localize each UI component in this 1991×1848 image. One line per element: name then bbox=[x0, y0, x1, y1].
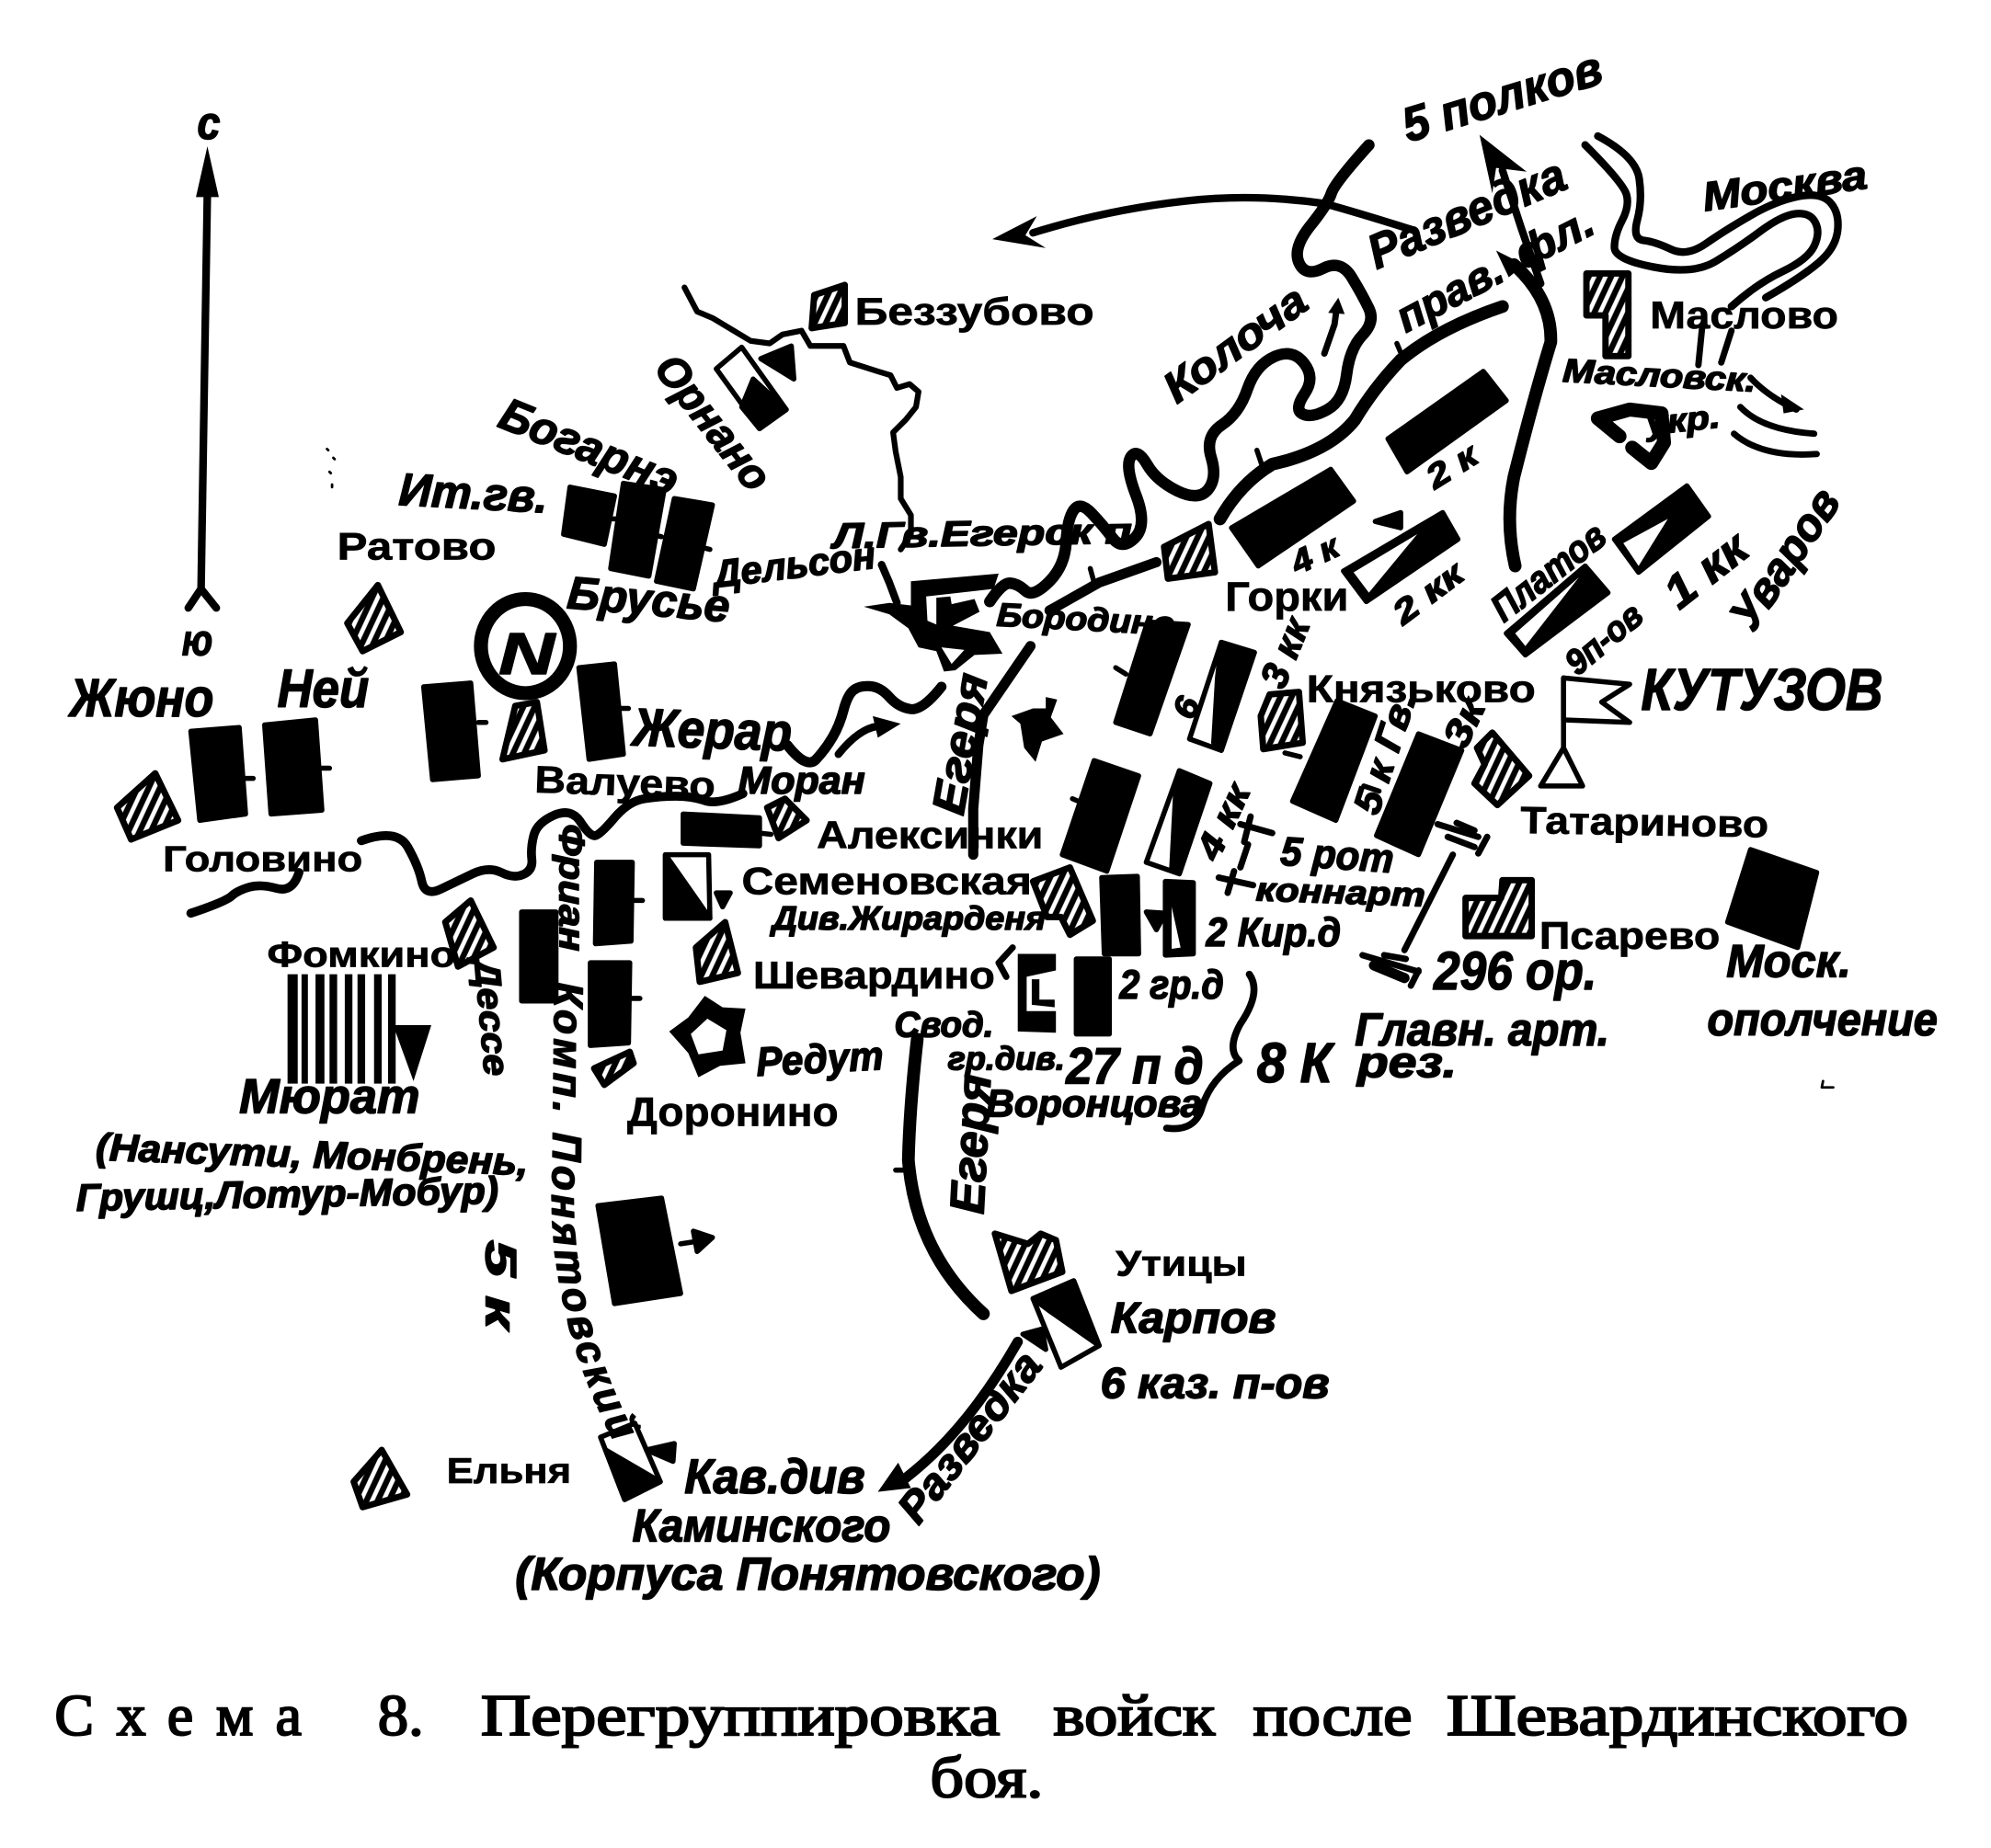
caption bbox=[55, 1683, 1908, 1810]
Murat cavalry bars bbox=[288, 975, 431, 1084]
unit: 3rd corps bbox=[1377, 734, 1461, 855]
label: Ornano: Орнано bbox=[646, 345, 782, 500]
label: Beauharnais: Богарнэ bbox=[492, 388, 686, 506]
label: Valuevo: Валуево bbox=[534, 758, 716, 807]
label: Kutuzov: КУТУЗОВ bbox=[1642, 657, 1882, 723]
label: militia: ополчение bbox=[1707, 994, 1938, 1045]
label: Semenovskaya: Семеновская bbox=[742, 859, 1032, 902]
unit: Guard bbox=[424, 683, 478, 780]
unit: Dessaix bbox=[521, 912, 556, 1001]
river: Kolocha upper bbox=[990, 145, 1371, 601]
label: Nansouty group: (Нансути, Монбрень, bbox=[95, 1125, 529, 1183]
village: Borodino bbox=[1164, 524, 1215, 578]
half unit: 4th cavalry bbox=[1146, 770, 1210, 873]
label: reserve: рез. bbox=[1356, 1038, 1457, 1087]
caption word: after: после bbox=[1253, 1683, 1413, 1748]
label: Poniatowski corps: (Корпуса Понятовского) bbox=[515, 1548, 1101, 1600]
river: Moskva inner bank bbox=[1585, 145, 1818, 306]
unit: Compans bbox=[590, 963, 630, 1045]
label: Redoubt: Редут bbox=[755, 1033, 885, 1085]
compass arrow: ю bbox=[182, 615, 212, 664]
label: Bezzubovo: Беззубово bbox=[855, 290, 1094, 333]
label: 2nd cuirassiers: 2 Кир.д bbox=[1206, 910, 1341, 955]
half unit: 2nd cavalry bbox=[1344, 512, 1458, 601]
label: 27th division: 27 п д bbox=[1065, 1038, 1204, 1095]
label: main artillery: Главн. арт. bbox=[1355, 1004, 1609, 1055]
label: Gorki: Горки bbox=[1225, 575, 1348, 620]
village labels bbox=[163, 290, 1838, 1491]
label: right: прав. bbox=[1387, 245, 1511, 341]
label: Karpov regiments: 6 каз. п-ов bbox=[1101, 1358, 1330, 1407]
village: Aleksinki bbox=[767, 799, 807, 838]
label: Kolocha river: Колоча bbox=[1153, 275, 1316, 412]
unit: 5th corps bbox=[598, 1198, 681, 1304]
compass arrow: с bbox=[197, 97, 220, 149]
label: Italian guard: Ит.гв. bbox=[397, 463, 549, 523]
troop units bbox=[191, 346, 1816, 1500]
label: Karpov: Карпов bbox=[1111, 1294, 1276, 1342]
arrow: right flank reconnaissance bbox=[1503, 170, 1540, 283]
label: 3rd corps: 3к bbox=[1434, 690, 1494, 754]
label: Junot: Жюно bbox=[67, 668, 213, 728]
label: Golovino: Головино bbox=[163, 840, 362, 880]
print specks bbox=[327, 449, 1833, 1088]
unit: Junot bbox=[191, 727, 246, 820]
half unit: Platov bbox=[1506, 566, 1608, 655]
label: Borodino: Бородино bbox=[996, 596, 1175, 643]
compass arrow bbox=[182, 97, 220, 664]
half unit: 2nd cuirassiers bbox=[1146, 882, 1194, 955]
Redoubt bbox=[669, 996, 746, 1078]
unit: 2nd corps bbox=[1388, 371, 1506, 472]
unit: Moscow militia bbox=[1728, 850, 1816, 948]
label: Utitsy: Утицы bbox=[1116, 1244, 1247, 1283]
brace: 8th corps bbox=[1167, 975, 1254, 1129]
village: Psarevo bbox=[1466, 880, 1532, 936]
label: 5 companies: 5 рот bbox=[1279, 829, 1395, 882]
label: right flank reconnaissance: Разведка bbox=[1359, 148, 1574, 279]
label: southern reconnaissance: Разведка bbox=[887, 1341, 1051, 1532]
half unit: 1st cavalry bbox=[1614, 485, 1709, 573]
arrow: southern reconnaissance bbox=[906, 1341, 1018, 1477]
label: horse artillery: коннарт bbox=[1255, 870, 1425, 914]
river: Moskva outer bank bbox=[1598, 136, 1838, 298]
caption word: scheme: Схема bbox=[55, 1683, 302, 1748]
unit: Ney bbox=[265, 720, 322, 814]
label: Uvarov: Уваров bbox=[1719, 478, 1850, 639]
caption word: troops: войск bbox=[1053, 1683, 1215, 1748]
label: grenadier division: гр.див. bbox=[948, 1039, 1065, 1077]
label: 4th corps: 4 к bbox=[1284, 526, 1346, 582]
line: right flank bbox=[1510, 265, 1550, 566]
label: 2nd cavalry corps: 2 кк bbox=[1384, 553, 1472, 633]
unit: 4th corps bbox=[1231, 469, 1354, 566]
village: Knyazkovo bbox=[1261, 692, 1303, 749]
label: Platov: Платов bbox=[1482, 513, 1614, 630]
label: flank: фл. bbox=[1506, 197, 1602, 278]
label: jaegers north: Егеря bbox=[922, 669, 998, 818]
unit ticks bbox=[246, 519, 1379, 998]
half unit: Karpov bbox=[1023, 1281, 1099, 1367]
label: Moskva river: Москва bbox=[1699, 153, 1870, 221]
unit: 7th corps bbox=[1062, 760, 1139, 872]
troop labels bbox=[67, 40, 1938, 1600]
unit: Semenovskaya block bbox=[1102, 876, 1139, 954]
label: jaegers south: Егеря bbox=[940, 1073, 1001, 1215]
stream: Orzhanka bbox=[684, 288, 919, 550]
line: jaegers north bbox=[1220, 306, 1503, 519]
label: Grouchy group: Грушц,Лотур-Мобур) bbox=[75, 1169, 498, 1219]
caption second line: боя. bbox=[930, 1745, 1043, 1810]
unit: Italian guard bbox=[564, 487, 614, 544]
village: Valuevo bbox=[502, 702, 544, 759]
village: Semenovskaya bbox=[1033, 867, 1093, 935]
unit: Morand bbox=[683, 814, 760, 846]
label: Tatarinovo: Татариново bbox=[1520, 798, 1769, 846]
label: Friant: Фриан bbox=[552, 824, 591, 952]
label: 5 regiments: 5 полков bbox=[1396, 40, 1608, 153]
label: Shevardino: Шевардино bbox=[753, 953, 995, 997]
label: Elnya: Ельня bbox=[447, 1452, 571, 1491]
caption word: Shevardino: Шевардинского bbox=[1447, 1683, 1908, 1748]
label: 5th corps: 5 к bbox=[476, 1240, 525, 1332]
village: Maslovo bbox=[1586, 273, 1629, 356]
half unit: Kaminsky cavalry bbox=[601, 1423, 674, 1500]
Borodino fortification bbox=[864, 565, 1002, 671]
unit: 27th division bbox=[1076, 959, 1109, 1034]
line: Borodino jaegers bbox=[973, 562, 1156, 855]
label: 4th cavalry: 4 кк bbox=[1189, 775, 1259, 867]
village: Elnya bbox=[354, 1450, 407, 1507]
small arrow near Kolocha bbox=[1324, 305, 1337, 354]
label: Psarevo: Псарево bbox=[1539, 914, 1720, 957]
troop movement lines and arrows bbox=[839, 135, 1550, 1492]
label: Maslovo: Маслово bbox=[1650, 293, 1838, 337]
line: jaegers south bbox=[909, 1039, 983, 1314]
label: combined: Свод. bbox=[895, 1005, 993, 1044]
label: 8th corps: 8 К bbox=[1257, 1032, 1335, 1094]
label: 296 guns: 296 ор. bbox=[1433, 941, 1596, 1001]
label: 6th corps number: 6 bbox=[1165, 690, 1207, 724]
label: Fomkino: Фомкино bbox=[268, 935, 455, 975]
villages bbox=[117, 273, 1629, 1507]
label: Dessaix: Дессе bbox=[466, 954, 516, 1078]
label: Aleksinki: Алексинки bbox=[817, 814, 1043, 857]
village: Bezzubovo bbox=[812, 285, 845, 328]
Napoleon position bbox=[481, 599, 570, 693]
village: Ratovo bbox=[348, 585, 401, 651]
river: Kolocha lower bbox=[361, 793, 743, 892]
half unit: Ornano bbox=[716, 346, 794, 428]
label: 3rd cavalry: 3 кк bbox=[1252, 610, 1319, 694]
unit: Beauharnais bbox=[611, 484, 664, 576]
label: 5th guards: 5 к Гв. bbox=[1344, 687, 1425, 819]
label: Girard division: Див.Жирарденя bbox=[770, 899, 1046, 937]
label: Knyazkovo: Князьково bbox=[1307, 667, 1536, 711]
label: Kaminsky: Каминского bbox=[633, 1500, 890, 1552]
label: Doronino: Доронино bbox=[627, 1089, 839, 1135]
village: Utitsy bbox=[995, 1234, 1062, 1291]
unit: Friant bbox=[595, 862, 633, 943]
label: Kaminsky division: Кав.див bbox=[684, 1450, 865, 1504]
label: Brusye: Брусье bbox=[566, 566, 732, 633]
artillery symbols bbox=[1219, 816, 1487, 986]
label: Ratovo: Ратово bbox=[338, 525, 497, 568]
village: Doronino bbox=[594, 1052, 634, 1085]
village: Fomkino bbox=[445, 900, 494, 966]
unit: 5th guards bbox=[1293, 701, 1375, 820]
label: Delzons: Дельсон bbox=[708, 533, 877, 596]
label: Gerard: Жерар bbox=[629, 698, 793, 763]
river: Kolocha middle bbox=[787, 686, 942, 762]
arrow: cavalry march west bbox=[1033, 198, 1413, 233]
label: Maslovo fortification: Масловск. bbox=[1562, 351, 1756, 399]
half unit: Semenovskaya cavalry bbox=[666, 855, 730, 918]
unit: 6th corps bbox=[1116, 622, 1188, 734]
label: Moscow: Моск. bbox=[1726, 935, 1851, 987]
Shevardino earthwork bbox=[999, 948, 1056, 1032]
unit direction arrow bbox=[681, 1241, 697, 1244]
label: Vorontsov: Воронцова bbox=[986, 1082, 1202, 1125]
village: Shevardino bbox=[696, 922, 738, 982]
caption number: 8. bbox=[378, 1683, 424, 1748]
unit: Gerard bbox=[578, 664, 624, 759]
Napoleon position: N bbox=[498, 622, 557, 687]
label: 2nd grenadiers: 2 гр.д bbox=[1118, 963, 1224, 1008]
small arrow near Moran bbox=[839, 726, 878, 754]
label: fortification: укр. bbox=[1642, 397, 1722, 442]
Maslovo fortification bbox=[1598, 409, 1664, 463]
label: Murat: Мюрат bbox=[239, 1069, 420, 1124]
label: Ney: Ней bbox=[278, 659, 369, 719]
label: 9 regiments: 9п-ов bbox=[1558, 596, 1651, 683]
village: Golovino bbox=[117, 773, 178, 839]
label: Poniatowski: Комп. Понятовский bbox=[551, 982, 641, 1439]
label: 1st cavalry corps: 1 кк bbox=[1653, 519, 1760, 619]
caption word: regrouping: Перегруппировка bbox=[481, 1683, 1000, 1748]
village: Tatarinovo bbox=[1474, 733, 1529, 805]
Semenovskaya fleche symbol bbox=[1012, 697, 1064, 762]
rivers bbox=[191, 136, 1838, 913]
label: Morand: Моран bbox=[738, 759, 865, 802]
Kutuzov headquarters flag bbox=[1540, 678, 1630, 786]
label: Guards jaegers: Л.Гв.Егерск п bbox=[830, 512, 1132, 556]
unit: Delzons bbox=[657, 498, 713, 588]
label: 2nd corps: 2 к bbox=[1418, 435, 1486, 496]
half unit: 3rd cavalry bbox=[1189, 643, 1254, 750]
